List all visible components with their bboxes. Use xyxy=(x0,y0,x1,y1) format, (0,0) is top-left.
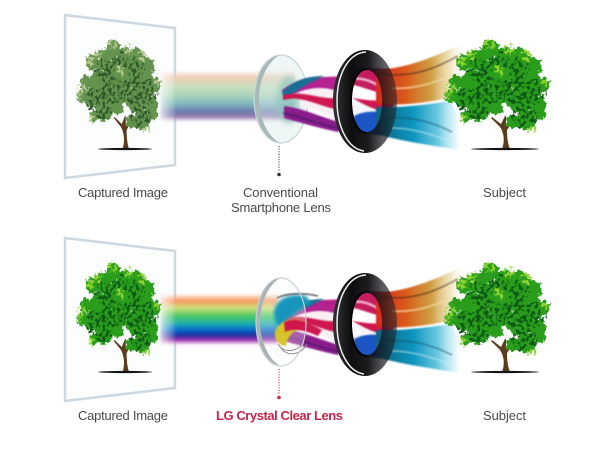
leader line xyxy=(277,146,281,176)
label: conventional smartphone lens: Conventional xyxy=(243,185,318,200)
camera ring xyxy=(333,50,397,153)
label: subject: Subject xyxy=(483,185,526,200)
light beam (vivid) xyxy=(160,295,278,344)
light beam (muted) xyxy=(160,72,295,121)
captured image frame xyxy=(65,238,175,401)
subject tree xyxy=(445,39,549,150)
subject tree xyxy=(445,262,549,373)
light rays through lens assembly xyxy=(282,44,464,150)
panel: conventional smartphone lens diagram xyxy=(65,15,549,215)
captured image frame xyxy=(65,15,175,178)
crystal clear lens xyxy=(256,278,322,366)
light rays through lens assembly xyxy=(282,267,464,373)
panel: LG crystal clear lens diagram xyxy=(65,238,549,423)
label: subject: Subject xyxy=(483,408,526,423)
label: conventional smartphone lens: Smartphone Lens xyxy=(231,200,332,215)
leader line xyxy=(277,369,281,399)
camera ring xyxy=(333,273,397,376)
captured tree (desaturated) xyxy=(77,39,160,150)
captured tree (vivid) xyxy=(77,262,160,373)
label: captured image: Captured Image xyxy=(78,408,168,423)
conventional lens glass xyxy=(254,55,308,143)
label: LG crystal clear lens: LG Crystal Clear Lens xyxy=(216,408,343,423)
label: captured image: Captured Image xyxy=(78,185,168,200)
